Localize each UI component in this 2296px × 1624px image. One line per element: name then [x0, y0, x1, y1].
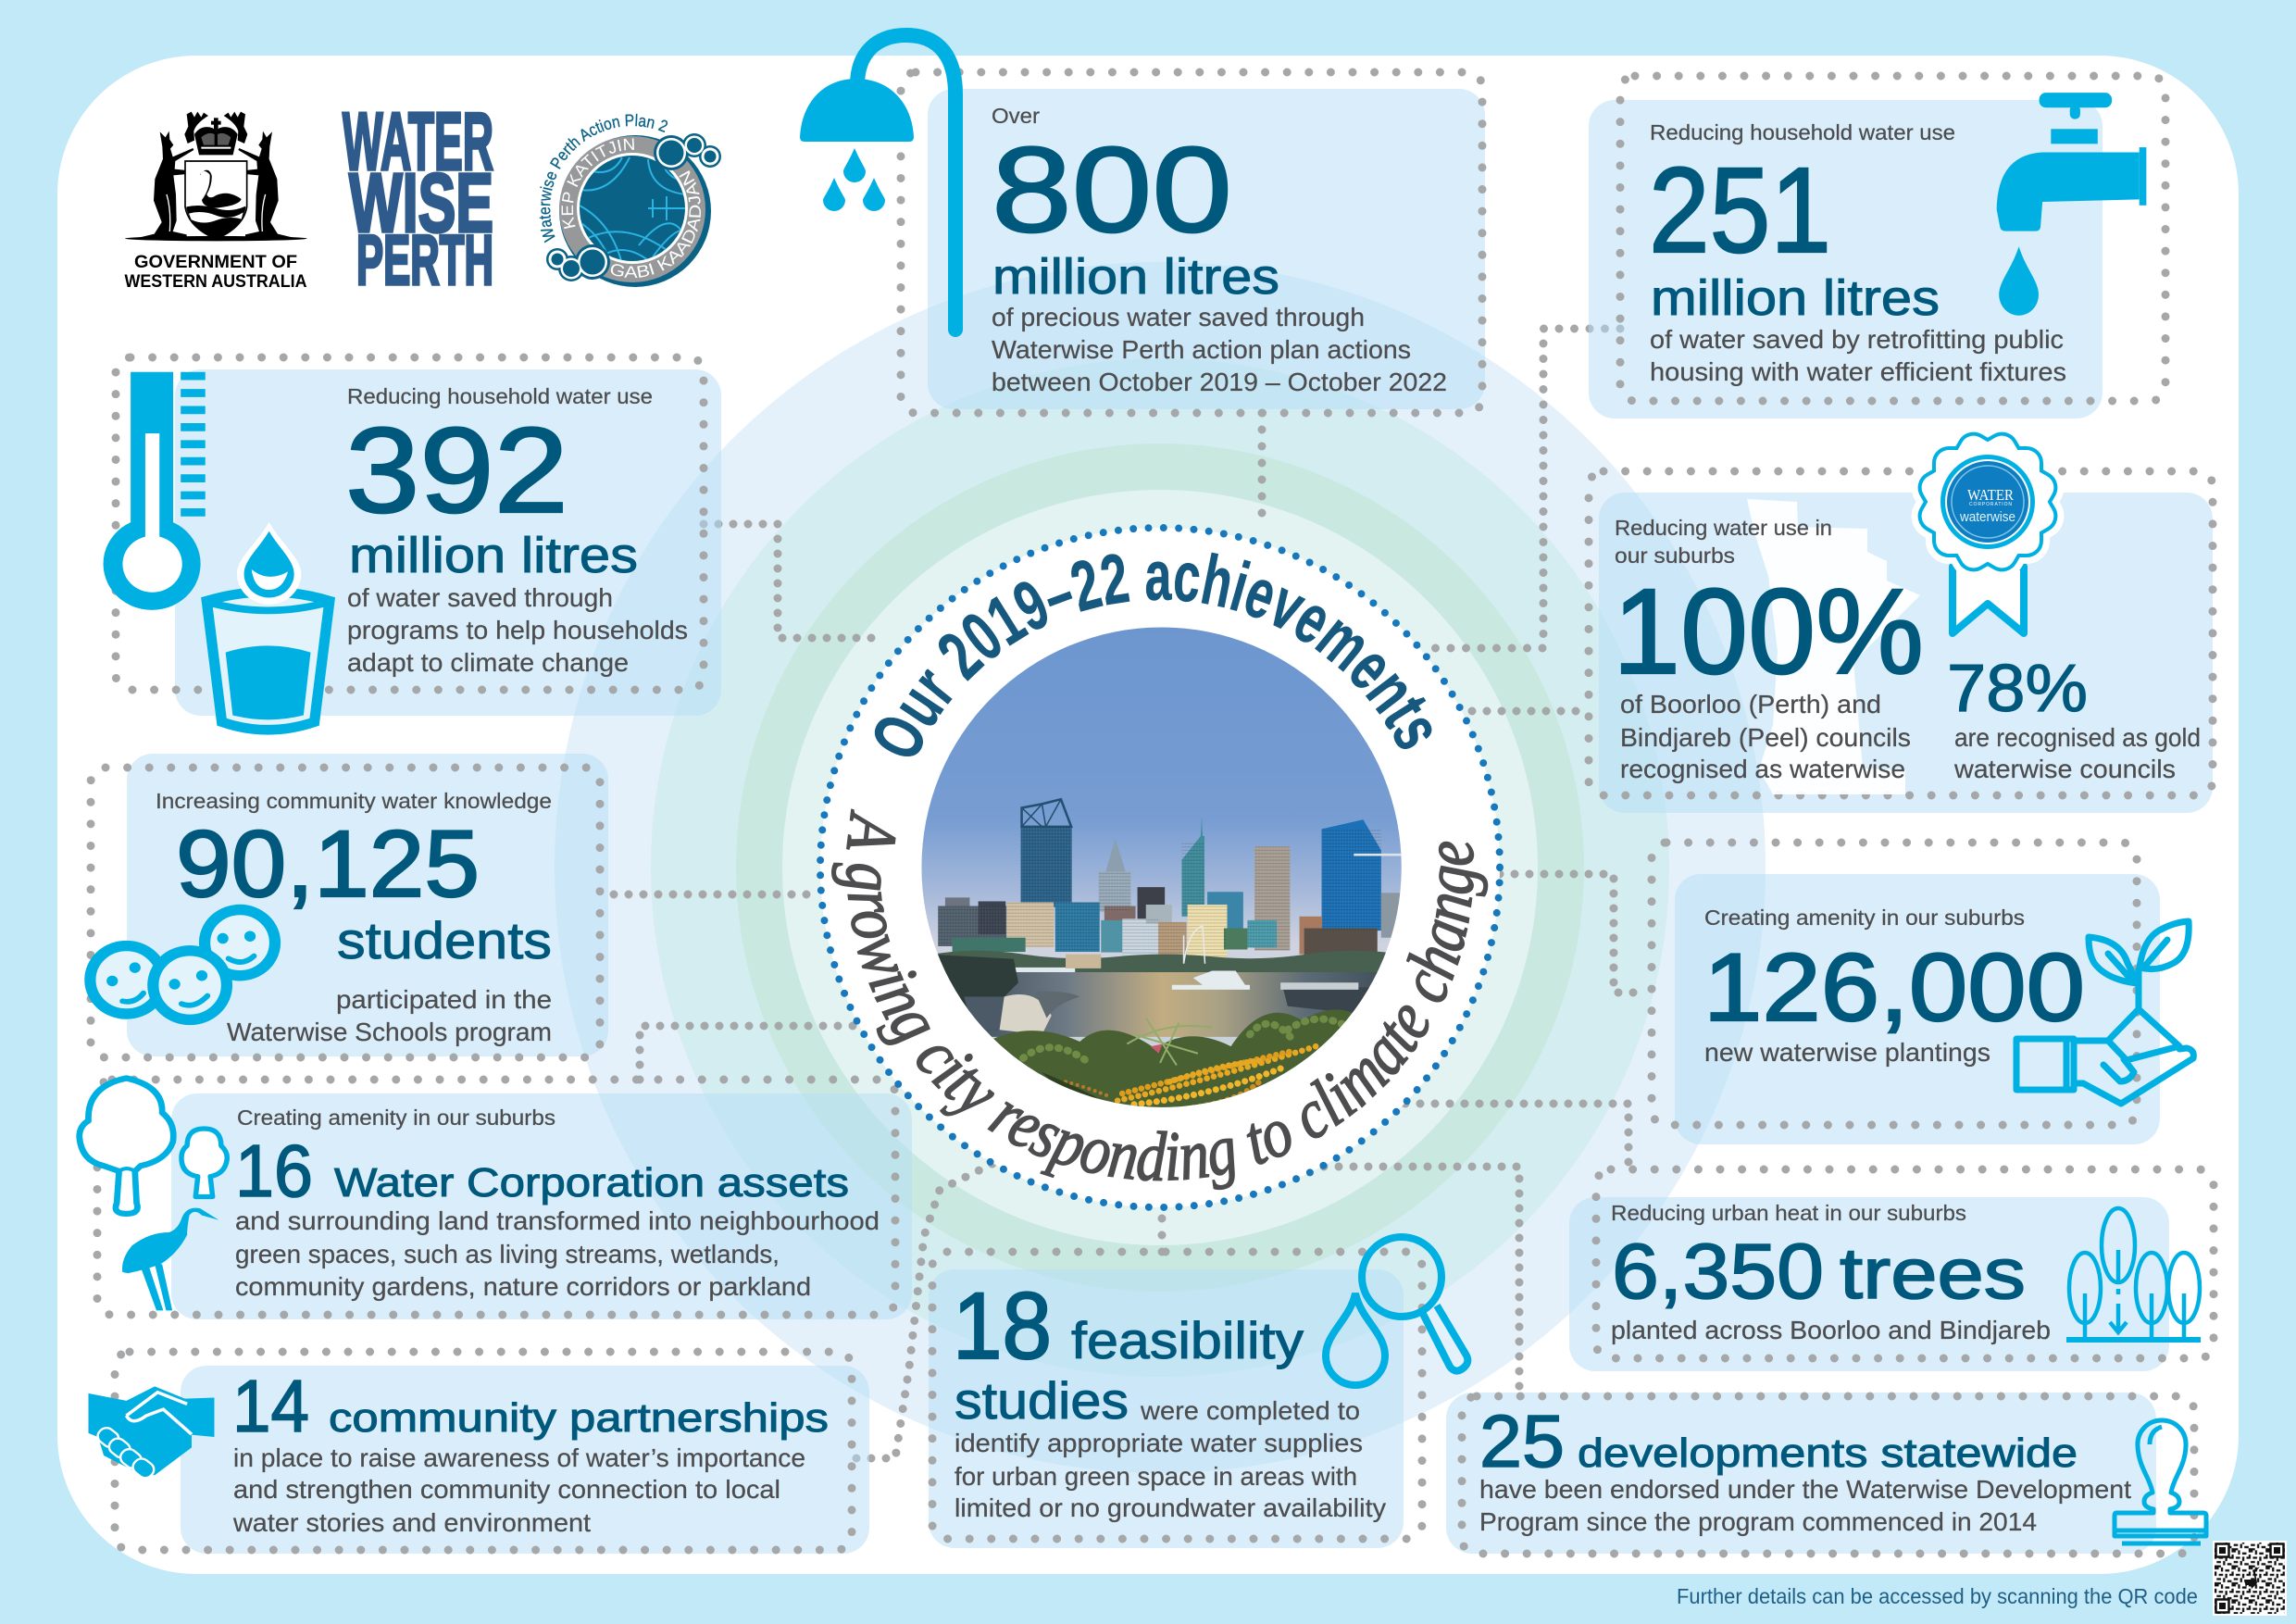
connector: 90,125 students to centre	[614, 891, 815, 898]
panel: 16 Water Corporation assets: Water Corporation assets	[334, 1160, 849, 1206]
panel: 90,125 students: students	[337, 911, 552, 969]
panel: 392 million litres: million litres	[349, 528, 638, 583]
icon: magnifying glass and water drop	[1326, 1237, 1467, 1385]
panel: 25 developments statewide: Program since the program commenced in 2014	[1479, 1507, 2037, 1536]
text: government name: GOVERNMENT OF	[134, 253, 297, 272]
panel: 14 community partnerships: in place to raise awareness of water’s importance	[233, 1443, 805, 1472]
connector: 14 partnerships to centre	[856, 1160, 1000, 1458]
panel: 18 feasibility studies: limited or no groundwater availability	[955, 1493, 1386, 1522]
title: Our 2019–22 achievements: Our 2019–22 achievements	[874, 552, 1431, 756]
icon: gold waterwise award ribbon: CORPORATION	[1969, 502, 2012, 507]
icon: coat of arms	[125, 112, 307, 241]
panel: 100 percent and 78 percent waterwise councils: waterwise councils	[1953, 755, 2176, 783]
panel: 100 percent and 78 percent waterwise councils: are recognised as gold	[1954, 723, 2201, 752]
icon: hand holding seedling	[2016, 921, 2193, 1104]
panel: 800 million litres: 800	[992, 121, 1232, 257]
panel: 16 Water Corporation assets	[80, 1078, 912, 1319]
panel: 251 million litres: million litres	[1651, 270, 1940, 326]
panel: 392 million litres: 392	[345, 402, 568, 538]
panel: 16 Water Corporation assets: community gardens, nature corridors or parkland	[235, 1272, 811, 1301]
panel: 800 million litres: of precious water saved through	[992, 303, 1365, 331]
panel: 14 community partnerships: 14	[232, 1365, 309, 1447]
connector: 18 feasibility studies to centre	[1157, 1204, 1167, 1252]
connector: 392 million litres to centre	[704, 524, 884, 638]
panel: 126,000 plantings: Creating amenity in our suburbs	[1704, 906, 2025, 930]
panel: 6,350 trees: trees	[1840, 1232, 2026, 1314]
logo: Water Wise Perth: WISE	[349, 157, 493, 250]
footer note: Further details can be accessed by scanning the QR code	[1677, 1584, 2198, 1608]
panel: 126,000 plantings: new waterwise plantings	[1704, 1038, 1990, 1067]
panel: 251 million litres	[1589, 76, 2165, 418]
panel: 251 million litres: 251	[1649, 142, 1831, 278]
concentric background circles	[555, 262, 1766, 1473]
logo: Waterwise Perth Action Plan 2: GABI KAADADJAN	[611, 170, 701, 278]
photo: Perth skyline	[921, 628, 1403, 1110]
panel: 18 feasibility studies: for urban green space in areas with	[955, 1462, 1357, 1491]
panel: 392 million litres: adapt to climate change	[347, 648, 629, 677]
panel: 251 million litres: Reducing household water use	[1650, 120, 1955, 144]
panel: 18 feasibility studies: studies	[955, 1371, 1129, 1430]
bubbles	[546, 133, 721, 281]
panel: 100 percent and 78 percent waterwise councils: Reducing water use in	[1615, 516, 1832, 540]
panel: 14 community partnerships: water stories and environment	[232, 1508, 591, 1537]
connector: 6,350 trees to centre	[1405, 1104, 1628, 1169]
icon: tap	[1997, 93, 2146, 316]
panel: 18 feasibility studies: were completed to	[1140, 1396, 1360, 1425]
panel: 392 million litres: of water saved through	[347, 583, 613, 612]
panel: 14 community partnerships: community partnerships	[329, 1395, 829, 1441]
panel: 100 percent and 78 percent waterwise councils: 78%	[1947, 652, 2088, 726]
connector: 100 percent to centre	[1472, 707, 1589, 715]
panel: 800 million litres: Over	[992, 104, 1040, 128]
panel: 100 percent and 78 percent waterwise councils: of Boorloo (Perth) and	[1620, 690, 1881, 718]
panel: 90,125 students: 90,125	[176, 811, 480, 917]
panel: 25 developments statewide	[1446, 1393, 2206, 1554]
icon: map of Perth and Peel	[1747, 499, 1920, 794]
panel: 90,125 students	[90, 754, 608, 1057]
icon: rubber stamp	[2115, 1420, 2206, 1543]
icon: glass with water drop	[202, 522, 334, 733]
panel: 392 million litres	[104, 357, 721, 733]
panel: 6,350 trees	[1569, 1169, 2214, 1371]
connector: 25 developments to centre	[1309, 1167, 1519, 1396]
logo: Water Wise Perth: PERTH	[356, 221, 493, 300]
panel: 800 million litres: Waterwise Perth action plan actions	[992, 335, 1411, 364]
panel: 18 feasibility studies: identify appropriate water supplies	[955, 1429, 1363, 1457]
panel: 16 Water Corporation assets: green spaces, such as living streams, wetlands,	[235, 1240, 780, 1268]
logo: Waterwise Perth Action Plan 2: Waterwise Perth Action Plan 2	[539, 113, 668, 243]
connector: 251 million litres to centre	[1429, 329, 1620, 648]
panel: 25 developments statewide: 25	[1479, 1400, 1565, 1482]
panel: 100 percent and 78 percent waterwise councils: recognised as waterwise	[1620, 755, 1905, 783]
panel: 25 developments statewide: have been endorsed under the Waterwise Development	[1479, 1475, 2131, 1504]
panel: 90,125 students: Waterwise Schools program	[227, 1018, 552, 1046]
panel: 100 percent and 78 percent waterwise councils	[1589, 431, 2213, 813]
panel: 14 community partnerships	[89, 1352, 869, 1554]
connector: 16 assets to centre	[640, 1026, 867, 1080]
panel: 6,350 trees: planted across Boorloo and Bindjareb	[1611, 1316, 2051, 1344]
icon: smiling faces	[90, 910, 275, 1019]
icon: row of trees with cooling arrow	[2066, 1208, 2201, 1340]
icon: gold waterwise award ribbon: waterwise	[1959, 509, 2015, 525]
panel: 25 developments statewide: developments statewide	[1578, 1430, 2078, 1476]
panel: 100 percent and 78 percent waterwise councils: Bindjareb (Peel) councils	[1620, 723, 1911, 752]
icon: thermometer	[104, 372, 206, 610]
panel: 392 million litres: Reducing household water use	[347, 384, 653, 408]
panel: 800 million litres: million litres	[992, 249, 1279, 305]
logo: Water Wise Perth	[343, 95, 493, 300]
icon: handshake	[89, 1386, 214, 1480]
icon: shower	[800, 35, 955, 330]
panel: 800 million litres	[800, 35, 1485, 413]
logo: Waterwise Perth Action Plan 2	[539, 113, 721, 287]
panel: 251 million litres: housing with water efficient fixtures	[1650, 357, 2066, 386]
centre badge: title ring and city photo	[817, 524, 1504, 1211]
panel: 392 million litres: programs to help households	[347, 616, 688, 644]
panel: 6,350 trees: 6,350	[1612, 1228, 1824, 1315]
panel: 800 million litres: between October 2019 – October 2022	[992, 368, 1447, 396]
logo: Waterwise Perth Action Plan 2: KEP KATITJIN	[561, 138, 634, 230]
panel: 16 Water Corporation assets: 16	[235, 1130, 313, 1212]
panel: 126,000 plantings: 126,000	[1703, 934, 2085, 1042]
panel: 90,125 students: participated in the	[336, 985, 552, 1014]
panel: 18 feasibility studies: feasibility	[1071, 1311, 1304, 1369]
panel: 16 Water Corporation assets: Creating amenity in our suburbs	[237, 1106, 555, 1130]
icon: trees and crane	[80, 1078, 227, 1310]
icon: gold waterwise award ribbon: WATER	[1967, 486, 2015, 504]
connector: 800 million litres to centre	[1257, 413, 1267, 523]
panel: 16 Water Corporation assets: and surrounding land transformed into neighbourhood	[235, 1206, 880, 1235]
connector: 126,000 plantings to centre	[1500, 874, 1645, 993]
logo: Government of Western Australia	[124, 112, 307, 292]
panel: 100 percent and 78 percent waterwise councils: our suburbs	[1615, 543, 1735, 568]
panel: 6,350 trees: Reducing urban heat in our suburbs	[1611, 1201, 1966, 1225]
panel: 18 feasibility studies: 18	[953, 1273, 1052, 1379]
QR code	[2213, 1541, 2287, 1616]
panel: 100 percent and 78 percent waterwise councils: 100%	[1613, 563, 1924, 699]
logo: Government of Western Australia: WESTERN AUSTRALIA	[124, 272, 307, 292]
panel: 18 feasibility studies	[929, 1237, 1467, 1548]
panel: 251 million litres: of water saved by retrofitting public	[1650, 325, 2064, 354]
panel: 14 community partnerships: and strengthen community connection to local	[233, 1475, 780, 1504]
panel: 126,000 plantings	[1652, 843, 2193, 1144]
icon: gold waterwise award ribbon	[1917, 431, 2058, 633]
panel: 90,125 students: Increasing community water knowledge	[156, 789, 552, 813]
logo: Water Wise Perth: WATER	[343, 95, 493, 187]
subtitle: A growing city responding to climate change: A growing city responding to climate change	[831, 808, 1489, 1191]
